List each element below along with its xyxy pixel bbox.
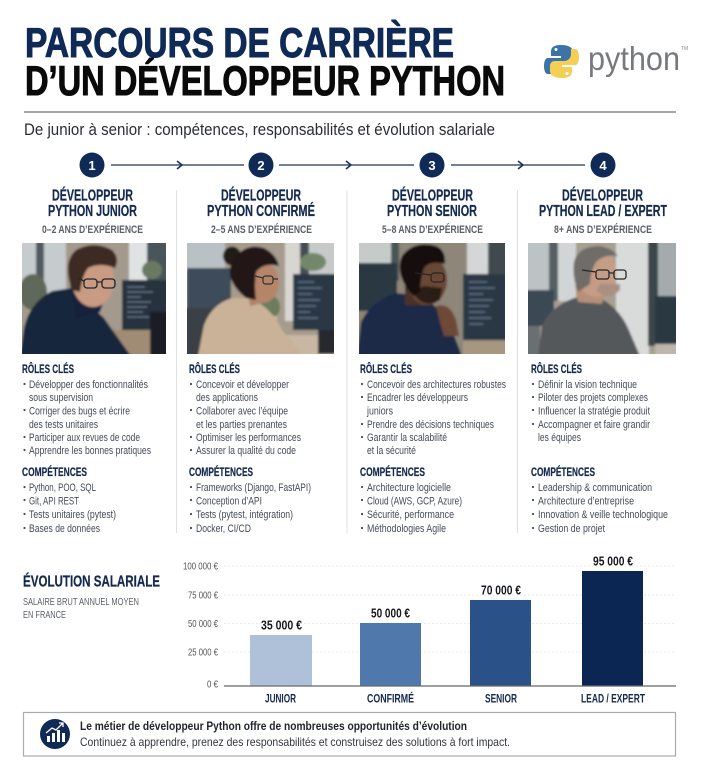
bar: lead: 95 000 € [593, 554, 633, 568]
heading: confirmed: PYTHON CONFIRMÉ [207, 203, 315, 220]
bar: junior: 35 000 € [261, 618, 302, 632]
roles: confirmed: et les parties prenantes [196, 419, 287, 431]
step 1 [80, 152, 104, 178]
skills: lead: Innovation & veille technologique [538, 509, 668, 521]
roles: junior: des tests unitaires [29, 419, 98, 431]
skills: lead: COMPÉTENCES [531, 466, 595, 479]
skills: junior: Git, API REST [29, 496, 79, 508]
heading: lead [539, 188, 667, 236]
bar: lead [581, 554, 645, 706]
skills: junior [22, 466, 116, 535]
step 3: 3 [428, 158, 436, 173]
skills: lead: Gestion de projet [538, 523, 606, 535]
skills: confirmed: Tests (pytest, intégration) [196, 509, 293, 521]
roles: junior: Participer aux revues de code [29, 432, 140, 444]
logo: python [544, 40, 688, 78]
subtitle: De junior à senior : compétences, responsabilités et évolution salariale [24, 121, 495, 139]
roles: junior: Apprendre les bonnes pratiques [29, 445, 151, 457]
title [25, 19, 505, 104]
roles: junior: sous supervision [29, 392, 93, 404]
skills: confirmed: Docker, CI/CD [196, 523, 251, 535]
heading: salary evolution [23, 574, 160, 621]
roles: senior: Encadrer les développeurs [367, 392, 468, 404]
skills: senior: Cloud (AWS, GCP, Azure) [367, 496, 462, 508]
step 2 [248, 152, 274, 178]
skills: senior: Sécurité, performance [367, 509, 454, 521]
roles: senior: et la sécurité [367, 445, 416, 457]
roles: lead: Influencer la stratégie produit [538, 406, 651, 418]
roles: confirmed: RÔLES CLÉS [189, 363, 240, 376]
heading: salary evolution: EN FRANCE [23, 609, 66, 621]
callout text: Continuez à apprendre, prenez des responsabilités et construisez des solutions à fort impact. [80, 735, 510, 749]
y axis labels: 25 000 € [188, 646, 218, 658]
bar: lead: LEAD / EXPERT [581, 694, 645, 706]
heading: junior: DÉVELOPPEUR [52, 188, 133, 204]
callout text [80, 719, 510, 749]
heading: senior [382, 188, 483, 236]
timeline [80, 152, 616, 178]
skills: confirmed: Frameworks (Django, FastAPI) [196, 482, 311, 494]
skills: lead: Leadership & communication [538, 482, 652, 494]
bar: junior [250, 618, 312, 706]
roles: confirmed: des applications [196, 392, 258, 404]
roles: confirmed: Concevoir et développer [196, 379, 289, 391]
arrow: step 1 to 2 [111, 161, 244, 169]
arrow: step 3 to 4 [451, 161, 585, 169]
roles: junior: RÔLES CLÉS [22, 363, 74, 376]
icon: growth chart [40, 719, 70, 749]
photo: senior developer [357, 241, 507, 356]
roles: senior [360, 363, 506, 457]
bar: confirmed [360, 606, 421, 706]
step 4: 4 [599, 158, 607, 173]
skills: confirmed: Conception d’API [196, 496, 262, 508]
roles: confirmed: Optimiser les performances [196, 432, 301, 444]
roles: senior: Garantir la scalabilité [367, 432, 447, 444]
step 2: 2 [257, 158, 265, 173]
heading: salary evolution: ÉVOLUTION SALARIALE [23, 574, 160, 590]
title: D’UN DÉVELOPPEUR PYTHON [25, 57, 505, 104]
photo: confirmed developer [185, 241, 336, 356]
heading: lead: 8+ ANS D’EXPÉRIENCE [554, 223, 652, 236]
photo: lead developer [526, 241, 678, 356]
step 1: 1 [88, 158, 96, 173]
y axis labels [183, 560, 218, 690]
skills: lead [531, 466, 668, 535]
skills: junior: Tests unitaires (pytest) [29, 509, 116, 521]
roles: confirmed: Collaborer avec l’équipe [196, 406, 288, 418]
roles: senior: Prendre des décisions techniques [367, 419, 494, 431]
panel: senior [357, 188, 507, 535]
skills: senior: Méthodologies Agile [367, 523, 446, 535]
step 4 [590, 152, 616, 178]
skills: lead: Architecture d’entreprise [538, 496, 634, 508]
roles: senior: juniors [366, 406, 393, 418]
skills: senior: Architecture logicielle [367, 482, 451, 494]
logo: python: python [588, 40, 680, 77]
skills: senior: COMPÉTENCES [360, 466, 425, 479]
heading: salary evolution: SALAIRE BRUT ANNUEL MOYEN [23, 596, 139, 608]
panel: junior [19, 188, 168, 535]
panel: confirmed [185, 188, 336, 535]
bar: senior [470, 582, 531, 706]
roles: confirmed [189, 363, 301, 457]
roles: junior: Corriger des bugs et écrire [29, 406, 130, 418]
heading: senior: PYTHON SENIOR [387, 203, 477, 220]
bar: senior: 70 000 € [481, 582, 521, 598]
heading: senior: 5–8 ANS D’EXPÉRIENCE [382, 223, 483, 236]
panel: lead [526, 188, 678, 535]
heading: lead: DÉVELOPPEUR [562, 188, 643, 204]
roles: junior: Développer des fonctionnalités [29, 379, 148, 391]
roles: lead: RÔLES CLÉS [531, 363, 582, 376]
heading: junior: PYTHON JUNIOR [48, 203, 137, 220]
arrow: step 2 to 3 [279, 161, 414, 169]
bar: confirmed: CONFIRMÉ [367, 692, 414, 706]
y axis labels: 100 000 € [183, 560, 218, 572]
title: PARCOURS DE CARRIÈRE [25, 19, 454, 66]
skills: junior: COMPÉTENCES [22, 466, 87, 479]
roles: senior: RÔLES CLÉS [360, 363, 412, 376]
callout [24, 712, 676, 756]
roles: lead: Piloter des projets complexes [538, 392, 648, 404]
step 3 [420, 152, 444, 178]
roles: lead [531, 363, 651, 444]
heading: senior: DÉVELOPPEUR [392, 188, 473, 204]
roles: lead: Définir la vision technique [538, 379, 637, 391]
logo: python: TM [681, 46, 688, 52]
callout text: Le métier de développeur Python offre de nombreuses opportunités d’évolution [80, 719, 467, 733]
roles: senior: Concevoir des architectures robustes [367, 379, 506, 391]
photo: junior developer [19, 241, 168, 356]
skills: junior: Python, POO, SQL [29, 482, 96, 494]
y axis labels: 50 000 € [188, 618, 218, 630]
skills: junior: Bases de données [29, 523, 100, 535]
y axis labels: 75 000 € [188, 590, 218, 602]
roles: junior [22, 363, 151, 457]
bar: senior: SENIOR [485, 694, 518, 706]
bar: confirmed: 50 000 € [371, 606, 410, 620]
y axis labels: 0 € [207, 678, 218, 690]
skills: confirmed: COMPÉTENCES [189, 466, 253, 479]
roles: lead: les équipes [538, 432, 581, 444]
skills: confirmed [189, 466, 311, 535]
heading: junior: 0–2 ANS D’EXPÉRIENCE [42, 223, 143, 236]
bar: junior: JUNIOR [265, 694, 296, 706]
roles: lead: Accompagner et faire grandir [538, 419, 650, 431]
heading: confirmed [207, 188, 315, 236]
roles: confirmed: Assurer la qualité du code [196, 445, 296, 457]
skills: senior [360, 466, 462, 535]
heading: junior [42, 188, 143, 236]
heading: confirmed: 2–5 ANS D’EXPÉRIENCE [211, 223, 312, 236]
bar chart: salaries [183, 554, 676, 706]
heading: confirmed: DÉVELOPPEUR [221, 188, 301, 204]
